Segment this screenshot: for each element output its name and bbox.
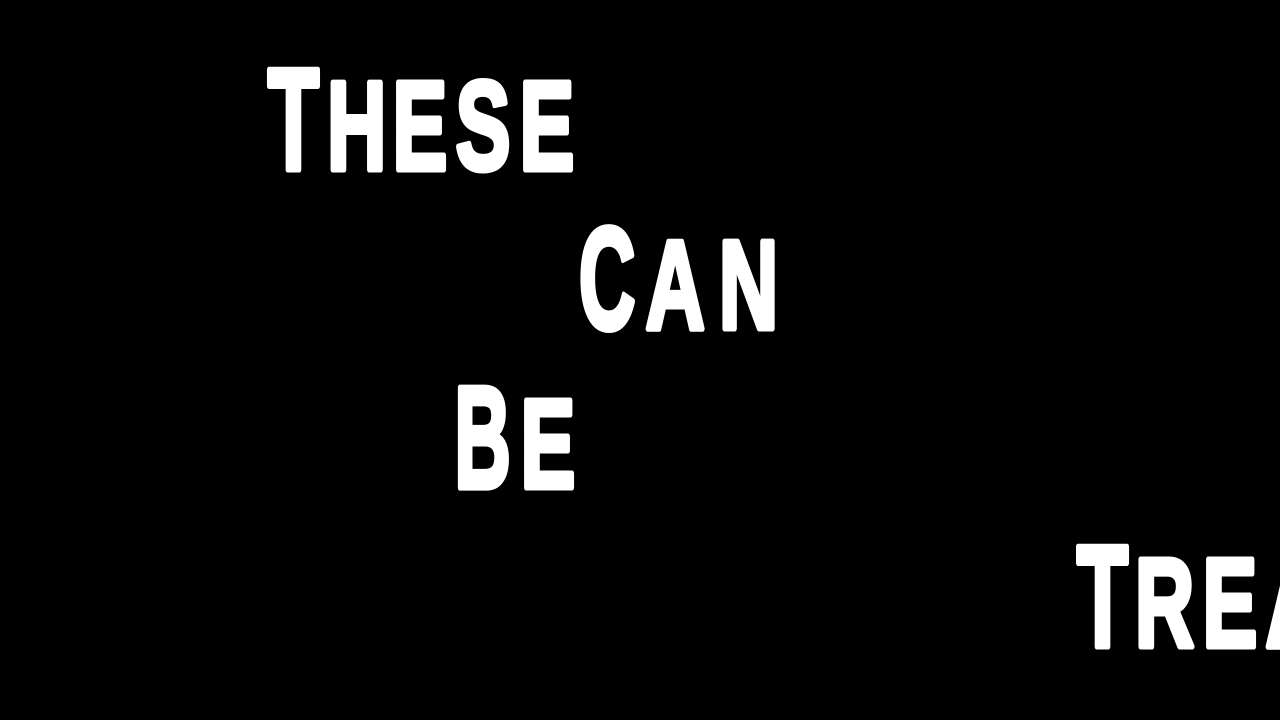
word: Can: AN xyxy=(645,213,778,356)
word: Can xyxy=(579,198,778,360)
word: Can: C xyxy=(579,198,635,360)
word: Treated (runs off the right edge): T xyxy=(1077,517,1128,678)
word: These: HESE xyxy=(327,54,574,197)
word: These: T xyxy=(268,40,319,201)
word: Be: B xyxy=(454,357,511,519)
word: Be: E xyxy=(521,372,575,515)
word: Treated (runs off the right edge) xyxy=(1077,517,1280,678)
word: Be xyxy=(454,357,575,519)
